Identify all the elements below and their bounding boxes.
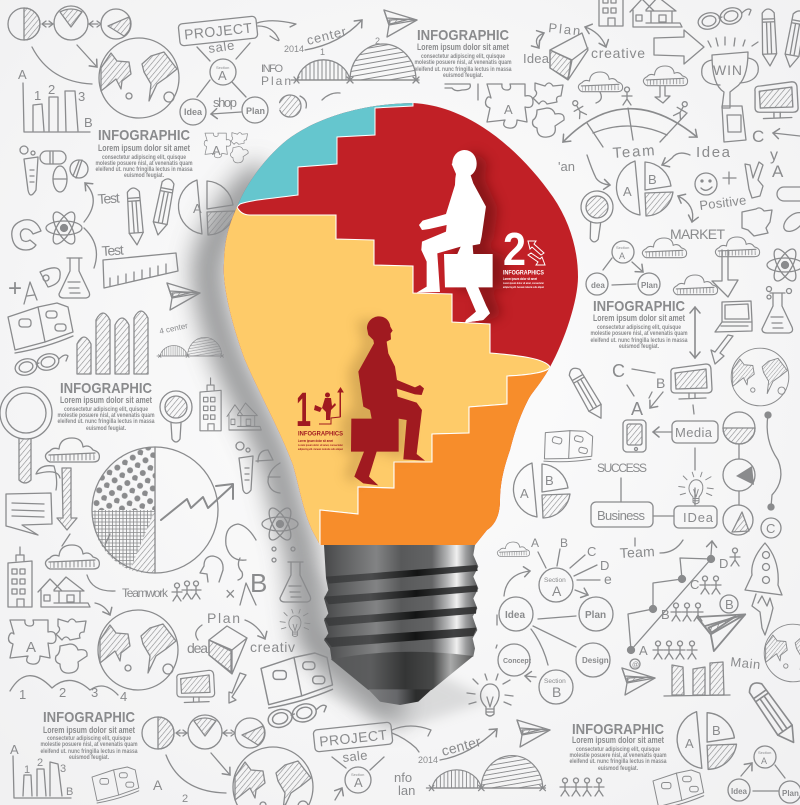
globe: [98, 610, 178, 690]
text block: infographic A: INFOGRAPHIC: [98, 127, 190, 144]
clouds market: [642, 238, 687, 258]
idea bulb: [679, 472, 713, 504]
text block: infographic E: molestie posuere nisl, at venenatis quam: [40, 742, 138, 748]
text block: infographic C: euismod feugiat.: [86, 426, 126, 432]
domes: [426, 756, 545, 791]
glasses: [13, 351, 68, 378]
label: 1 infographics: 1: [296, 384, 311, 437]
doodles: middle right: B: [545, 473, 554, 488]
boxes: Media: [675, 425, 713, 440]
puzzle: [8, 619, 87, 673]
figure: red man with briefcase: [351, 316, 425, 485]
arcs: 4: [120, 689, 127, 704]
abc loop: C: [612, 361, 625, 381]
shadow: paper curl around bulb: [208, 172, 490, 730]
section flow: shop: [213, 95, 237, 110]
doodles: top right: [445, 0, 800, 333]
text block: infographic A: eleifend ut. nunc fringilla lectus in massa: [96, 167, 193, 173]
arrow down: [57, 468, 77, 530]
boxes: IDea: [683, 510, 714, 525]
smile and positive: Positive: [699, 192, 747, 213]
bar chart: A: [18, 67, 27, 82]
plan cube: dea: [187, 640, 208, 656]
plane lower: [517, 720, 550, 747]
light bulb glass with staircase sections: [224, 103, 578, 545]
doodles: middle right: C: [766, 521, 775, 536]
plan cube: Idea: [523, 51, 550, 66]
text block: infographic D: molestie posuere nisl, at venenatis quam: [590, 331, 688, 337]
section flow: PROJECT: [183, 19, 253, 43]
small magnifier: [160, 391, 192, 442]
arrows: [166, 753, 230, 793]
text block: infographic B: euismod feugiat.: [443, 73, 483, 79]
text block: infographic E: eleifend ut. nunc fringilla lectus in massa: [40, 749, 138, 755]
label: 1 infographics: [296, 384, 344, 451]
text block: infographic D: [590, 298, 688, 350]
text block: infographic A: euismod feugiat.: [124, 173, 164, 179]
double arrow: [694, 307, 696, 358]
trophy: [702, 37, 758, 142]
chunky arrow: [711, 335, 733, 364]
pie A B: B: [648, 172, 657, 187]
text block: infographic F: eleifend ut. nunc fringilla lectus in massa: [570, 759, 667, 765]
doodles: lower left: [8, 545, 431, 805]
doodles: lower left: A: [26, 639, 36, 656]
doodles: lower right: A: [685, 736, 694, 751]
doodles: lower left: A: [153, 777, 163, 793]
section flow: A: [552, 583, 562, 599]
rocket: [745, 543, 782, 635]
team arc: Team: [612, 142, 655, 162]
pie A B: A: [623, 184, 632, 199]
section flow: B: [552, 684, 561, 700]
section flow: Plan: [585, 610, 606, 621]
letters C A: A: [772, 162, 784, 181]
text block: infographic D: Lorem ipsum dolor sit amet: [593, 313, 685, 323]
section: teal top: [236, 103, 414, 208]
section trio: Plan: [782, 789, 799, 798]
section flow: Section: [544, 678, 566, 685]
section trio: Idea: [731, 787, 748, 796]
bar chart lower: 3: [60, 763, 66, 775]
letters C A: [752, 127, 800, 235]
ruler: [103, 253, 178, 288]
section flow: [178, 16, 362, 125]
section flow: sale: [207, 37, 235, 56]
letters C A: C: [752, 127, 764, 146]
doodles: top right: A: [504, 102, 513, 117]
doodles: lower right: center: [440, 733, 483, 759]
plane top: [384, 10, 417, 37]
arrows to globe: [32, 45, 97, 84]
bars: [664, 662, 730, 696]
project: sale: [342, 747, 368, 765]
shadow: white man: [456, 152, 505, 325]
boxes: SUCCESS: [597, 461, 647, 475]
pie A B: [616, 161, 673, 216]
bar chart: [18, 67, 93, 132]
plane big: [697, 601, 753, 653]
smile and positive: [670, 162, 763, 242]
smile and positive: MARKET: [670, 226, 725, 242]
plane small: [622, 668, 655, 695]
clouds: [578, 72, 623, 92]
text block: infographic E: Lorem ipsum dolor sit amet: [43, 725, 135, 735]
doodles: lower left: Teamwork: [122, 586, 169, 600]
globe right: [764, 624, 800, 682]
doodles: lower right: nfo: [394, 770, 412, 785]
building: [8, 547, 32, 607]
atom and C: [12, 209, 82, 250]
network: D: [719, 556, 728, 571]
text block: infographic E: euismod feugiat.: [69, 755, 109, 761]
pencils: [126, 188, 144, 245]
doodles: lower right: @: [632, 662, 639, 669]
doodles: top left: A: [212, 143, 221, 158]
icon: arrows: [528, 241, 545, 265]
globe: [731, 348, 789, 406]
text block: infographic F: consectetur adipiscing elit, quisque: [576, 747, 661, 753]
bar chart lower: 1: [24, 764, 30, 776]
big magnifier: [0, 387, 52, 483]
text block: infographic D: consectetur adipiscing elit, quisque: [597, 325, 682, 331]
plan cube: Plan: [548, 20, 581, 38]
plan cube: [187, 610, 295, 674]
letters: [225, 558, 267, 605]
project: [313, 722, 431, 800]
pie: [513, 463, 570, 518]
section flow: Plan: [261, 74, 291, 88]
phone: [623, 420, 646, 452]
arrow loop between tests: [84, 183, 93, 222]
label: 1 infographics: Lorem ipsum dolor sit amet: [298, 439, 334, 443]
text block: infographic B: INFOGRAPHIC: [417, 27, 509, 44]
glasses: [696, 5, 751, 32]
cloud: [497, 542, 530, 556]
label: 2 infographics: INFOGRAPHICS: [503, 270, 544, 276]
project: Section: [351, 772, 364, 777]
label: 1 infographics: INFOGRAPHICS: [298, 430, 344, 438]
text block: infographic B: Lorem ipsum dolor sit amet: [417, 42, 509, 52]
section flow: Idea: [505, 610, 525, 621]
text block: infographic C: Lorem ipsum dolor sit amet: [60, 395, 152, 405]
doodles: lower right: lan: [398, 783, 415, 798]
text block: infographic F: molestie posuere nisl, at venenatis quam: [570, 753, 666, 759]
network: A: [639, 643, 648, 658]
icon: climbing man and stairs: [314, 388, 343, 424]
label: 2 infographics: Lorem ipsum dolor sit amet: [503, 277, 537, 281]
doodles: lower right: [394, 536, 800, 805]
text block: infographic F: INFOGRAPHIC: [572, 721, 664, 738]
pie small cut off: [178, 180, 235, 235]
flask right: [762, 293, 793, 333]
section flow: C: [587, 544, 596, 559]
label: 2 infographics: 2: [503, 223, 526, 275]
arcs: [10, 676, 127, 704]
label: 1 infographics: adipiscing elit. Aenean molestie odio aliquet: [298, 447, 343, 451]
metal body: [324, 545, 478, 660]
text block: infographic E: consectetur adipiscing elit, quisque: [47, 736, 132, 742]
text block: infographic F: euismod feugiat.: [598, 766, 638, 772]
small section: Section: [616, 245, 629, 250]
section flow: [496, 536, 613, 704]
text block: infographic B: consectetur adipiscing elit, quisque: [421, 54, 506, 60]
team arrows: Team: [619, 543, 655, 561]
text block: infographic C: [58, 380, 155, 432]
test tube: [226, 442, 298, 560]
head: [36, 466, 60, 490]
plan cube: creative: [591, 45, 645, 61]
globe: [99, 38, 179, 118]
glasses: [266, 701, 326, 730]
note speech: [6, 493, 52, 535]
globe lower: [233, 747, 313, 805]
text block: infographic B: molestie posuere nisl, at venenatis quam: [414, 60, 512, 66]
project: PROJECT: [318, 726, 388, 750]
media chain: [671, 364, 712, 399]
bar chart lower: B: [66, 786, 73, 798]
monitor: [177, 670, 215, 703]
doodles: lower right: B: [712, 723, 721, 738]
boxes: Business: [597, 508, 646, 523]
doodles: top left: [8, 6, 419, 304]
bar chart lower: [10, 742, 73, 798]
text block: infographic C: molestie posuere nisl, at venenatis quam: [58, 413, 154, 419]
doodles: middle left: [0, 283, 298, 573]
doodles: middle right: A: [520, 486, 529, 501]
book lower: [92, 767, 139, 803]
three pie circles: [8, 6, 131, 40]
buildings: [599, 0, 623, 26]
text block: infographic A: consectetur adipiscing elit, quisque: [102, 155, 187, 161]
squiggle pin: [767, 415, 781, 507]
text block: infographic E: INFOGRAPHIC: [43, 709, 135, 726]
section flow: Idea: [184, 107, 203, 117]
small section: A: [619, 251, 625, 261]
bulb: [280, 609, 310, 637]
bars: [77, 311, 148, 374]
arcs: 2: [59, 685, 66, 700]
section flow: Design: [582, 656, 609, 665]
book lower right: [653, 770, 704, 805]
puzzle top: [486, 83, 564, 137]
book: [8, 303, 73, 353]
section trio: A: [761, 756, 767, 766]
section flow: center: [305, 24, 348, 48]
section flow: B: [560, 536, 568, 550]
letters: +: [8, 275, 22, 302]
text block: infographic E: [40, 709, 138, 761]
pills and test tube: [20, 146, 88, 195]
trio: [142, 715, 265, 749]
text block: infographic F: [570, 721, 667, 772]
book: [261, 653, 332, 708]
trophy: WIN: [713, 62, 742, 78]
text block: infographic A: Lorem ipsum dolor sit amet: [98, 143, 190, 153]
abc loop: A: [631, 399, 643, 419]
section flow: Plan: [246, 106, 265, 116]
plan cube: creativ: [250, 639, 295, 655]
text block: infographic C: consectetur adipiscing elit, quisque: [64, 407, 149, 413]
paper plane: [167, 283, 200, 310]
section flow: INFO: [261, 63, 283, 75]
section trio: [728, 746, 800, 803]
letters: B: [250, 568, 267, 598]
head: [200, 556, 223, 582]
contact tip: [368, 689, 432, 705]
bar chart lower: A: [10, 742, 19, 757]
label: 2 infographics: Lorem ipsum dolor sit amet, consectetur: [503, 281, 545, 285]
text block: infographic B: eleifend ut. nunc fringilla lectus in massa: [414, 67, 512, 73]
circle chain: [723, 412, 755, 535]
text block: infographic C: eleifend ut. nunc fringilla lectus in massa: [58, 419, 155, 425]
doodles: top left: Test: [97, 189, 120, 207]
small puzzle: [742, 208, 772, 236]
pencils top right: [761, 9, 777, 66]
building and house: [200, 378, 221, 431]
pie lower: [677, 712, 736, 769]
white foot overlap: [465, 307, 490, 323]
text block: infographic B: [414, 27, 512, 79]
arrow: [654, 30, 704, 64]
abc loop: [612, 361, 665, 419]
text block: infographic D: euismod feugiat.: [619, 344, 659, 350]
bar chart: B: [84, 115, 93, 130]
monitor: [755, 82, 798, 119]
section: orange lower: [319, 366, 550, 545]
bar chart: 2: [48, 82, 55, 97]
team arc: [558, 87, 731, 185]
text block: infographic A: [96, 127, 193, 179]
network: B: [661, 607, 670, 622]
idea bulb: [467, 674, 513, 716]
boxes: [591, 405, 718, 528]
down arrow: [712, 250, 738, 297]
project: A: [354, 775, 363, 790]
pencil big: [746, 679, 800, 747]
puzzle: [204, 133, 248, 163]
section flow: Concept: [503, 658, 532, 665]
doodles: lower right: B: [725, 597, 734, 612]
bulb screw base: [324, 545, 478, 705]
flask: [280, 562, 311, 602]
section flow: A: [531, 536, 539, 550]
cloud: [45, 438, 99, 462]
doodles: lower right: 2014: [418, 755, 438, 765]
bar chart: 1: [34, 88, 41, 103]
doodles: top left: 2: [375, 36, 380, 46]
label: 2 infographics: [503, 232, 546, 288]
screw thread bands: [324, 565, 478, 647]
text block: infographic F: Lorem ipsum dolor sit amet: [572, 735, 664, 745]
cloud: [45, 545, 99, 569]
bar chart: 3: [78, 89, 85, 104]
shadow: red man: [341, 320, 410, 483]
plan cube: Plan: [207, 610, 240, 626]
section flow: Section: [544, 577, 566, 584]
house: [38, 577, 90, 607]
flask left: [59, 258, 90, 298]
doodles: lower right: Main: [730, 654, 761, 672]
section: red upper: [224, 103, 578, 545]
section flow: D: [600, 558, 609, 573]
doodles: middle left: 4 center: [159, 321, 189, 336]
magnifier: [578, 190, 614, 243]
section flow: e: [604, 571, 612, 587]
section trio: Section: [758, 750, 771, 755]
doodles: top left: A: [193, 201, 202, 216]
letters C A: y: [770, 147, 778, 164]
people rows: [560, 548, 740, 796]
people: [172, 583, 182, 601]
doodles: middle right: [513, 307, 789, 538]
team arc: Idea: [696, 144, 731, 161]
doodles: top left: Test: [101, 241, 124, 259]
section flow: 2014: [284, 44, 304, 54]
book: [539, 422, 597, 472]
lower cone: [331, 652, 473, 690]
text block: infographic A: molestie posuere nisl, at venenatis quam: [96, 161, 192, 167]
small section: dea: [591, 281, 605, 290]
text block: infographic D: INFOGRAPHIC: [593, 298, 685, 315]
doodles: lower left: 2: [182, 793, 188, 805]
section flow: A: [218, 68, 227, 83]
laptop: [715, 301, 752, 332]
figure: white man with briefcase: [417, 150, 493, 323]
label: 1 infographics: Lorem ipsum dolor sit amet, consectetur: [298, 443, 344, 447]
bar chart lower: 2: [37, 757, 43, 769]
small section: [586, 241, 660, 295]
letters: ×: [225, 584, 236, 604]
network: C: [690, 577, 699, 592]
chunky arrow: [229, 673, 246, 703]
small section: Plan: [641, 281, 658, 290]
team arrows: [619, 538, 712, 561]
text block: infographic C: INFOGRAPHIC: [60, 380, 152, 397]
abc loop: B: [656, 375, 665, 391]
domes small: [157, 337, 223, 358]
arcs: 3: [91, 685, 98, 700]
doodles: top left: 1: [320, 47, 325, 57]
label: 2 infographics: adipiscing elit. Aenean molestie odio aliquet: [503, 285, 544, 289]
pencil: [566, 365, 607, 422]
network: [628, 556, 728, 658]
section flow: Section: [216, 65, 229, 70]
arcs: 1: [19, 687, 26, 702]
big pie: [92, 447, 233, 573]
atom right: [767, 246, 800, 284]
small curls by bulb: [279, 95, 301, 117]
team arc: 'an: [558, 159, 575, 174]
text block: infographic D: eleifend ut. nunc fringilla lectus in massa: [590, 338, 688, 344]
plan cube: [523, 20, 645, 80]
section: yellow middle: [200, 207, 550, 555]
